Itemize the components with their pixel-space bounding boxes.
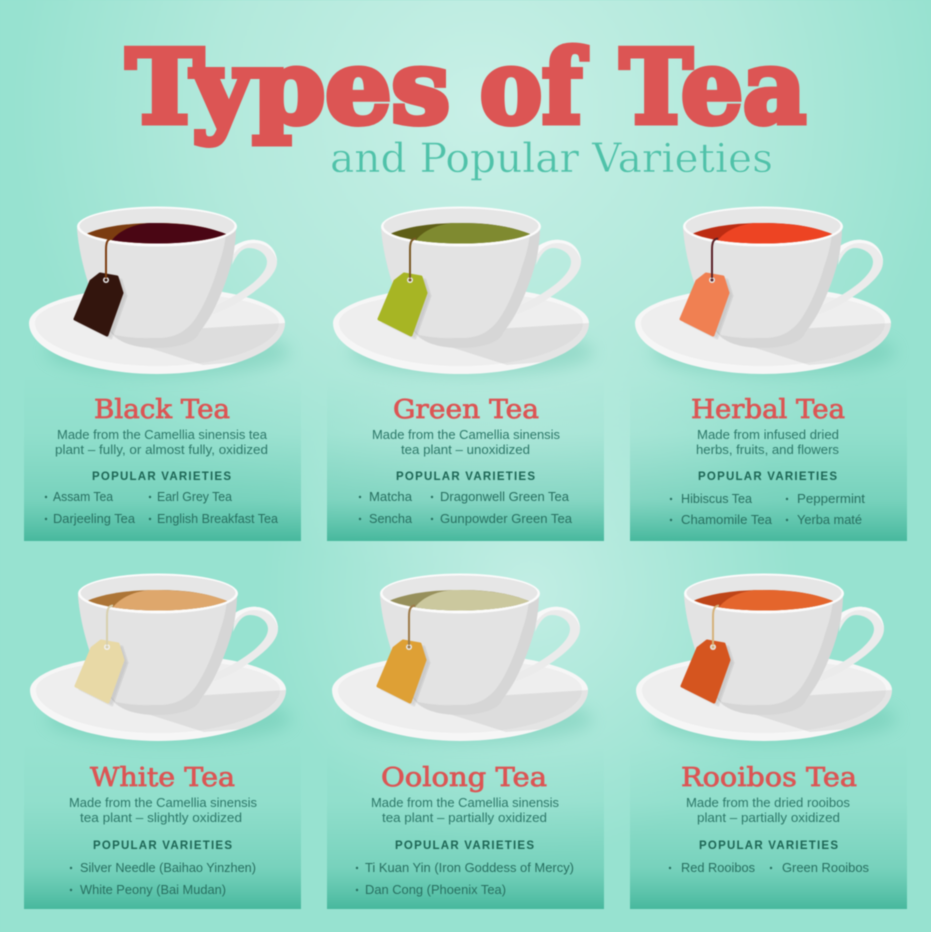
title: of [480,28,587,147]
varieties list [70,861,256,897]
varieties list: White Peony (Bai Mudan) [80,883,226,897]
varieties list [669,861,869,875]
panel: herbal tea [630,206,907,541]
title: Types [126,28,450,147]
varieties heading: POPULAR VARIETIES [93,840,232,852]
varieties list [45,490,278,526]
panel: black tea [24,206,301,541]
varieties list: Gunpowder Green Tea [440,512,572,526]
description: tea plant – partially oxidized [382,811,547,825]
description: Made from the Camellia sinensis [371,796,559,810]
icon: white tea cup [30,574,291,743]
description: tea plant – unoxidized [401,443,530,457]
description: Made from infused dried [697,428,839,442]
description [69,796,257,825]
varieties list [359,490,572,526]
varieties list: Peppermint [797,492,866,506]
heading: White Tea: White Tea [90,762,235,793]
description: Made from the dried rooibos [686,796,850,810]
varieties list: Earl Grey Tea [157,490,232,504]
varieties list: Hibiscus Tea [681,492,752,506]
title: Tea [620,28,806,147]
heading: Black Tea: Black Tea [94,394,230,425]
varieties heading: POPULAR VARIETIES [395,840,534,852]
varieties heading: POPULAR VARIETIES [699,840,838,852]
varieties list: Ti Kuan Yin (Iron Goddess of Mercy) [365,861,574,875]
heading: Rooibos Tea: Rooibos Tea [681,762,857,793]
icon: oolong tea cup [332,574,593,743]
varieties list: Yerba maté [797,513,862,527]
varieties list: Dragonwell Green Tea [440,490,569,504]
description: Made from the Camellia sinensis [69,796,257,810]
varieties list: Assam Tea [53,490,113,504]
description: plant – fully, or almost fully, oxidized [55,443,268,457]
varieties list: Green Rooibos [782,861,869,875]
description [696,428,839,457]
varieties list: Dan Cong (Phoenix Tea) [365,883,506,897]
description [686,796,850,825]
panel: oolong tea [327,574,604,909]
panel: green tea [327,206,604,541]
description [371,796,559,825]
panel: white tea [24,574,301,909]
description: herbs, fruits, and flowers [696,443,839,457]
panel: rooibos tea [630,574,907,909]
heading: Oolong Tea: Oolong Tea [381,762,547,793]
varieties heading: POPULAR VARIETIES [396,471,535,483]
varieties list [670,492,866,527]
icon: black tea cup [29,206,290,376]
heading: Herbal Tea: Herbal Tea [691,394,845,425]
description: tea plant – slightly oxidized [80,811,242,825]
varieties list: Matcha [369,490,412,504]
varieties heading: POPULAR VARIETIES [92,471,231,483]
varieties list: Chamomile Tea [681,513,772,527]
icon: herbal tea cup [635,206,896,376]
varieties list: English Breakfast Tea [157,512,278,526]
icon: green tea cup [333,206,594,376]
varieties list [356,861,574,897]
varieties list: Silver Needle (Baihao Yinzhen) [80,861,256,875]
varieties list: Sencha [369,512,412,526]
subtitle: and Popular Varieties [330,136,773,182]
varieties list: Darjeeling Tea [53,512,135,526]
heading: Green Tea: Green Tea [393,394,539,425]
title [126,28,806,147]
description: Made from the Camellia sinensis [372,428,560,442]
description [372,428,560,457]
icon: rooibos tea cup [636,574,897,743]
description: Made from the Camellia sinensis tea [57,428,267,442]
description: plant – partially oxidized [697,811,840,825]
description [55,428,268,457]
varieties list: Red Rooibos [681,861,755,875]
varieties heading: POPULAR VARIETIES [698,471,837,483]
